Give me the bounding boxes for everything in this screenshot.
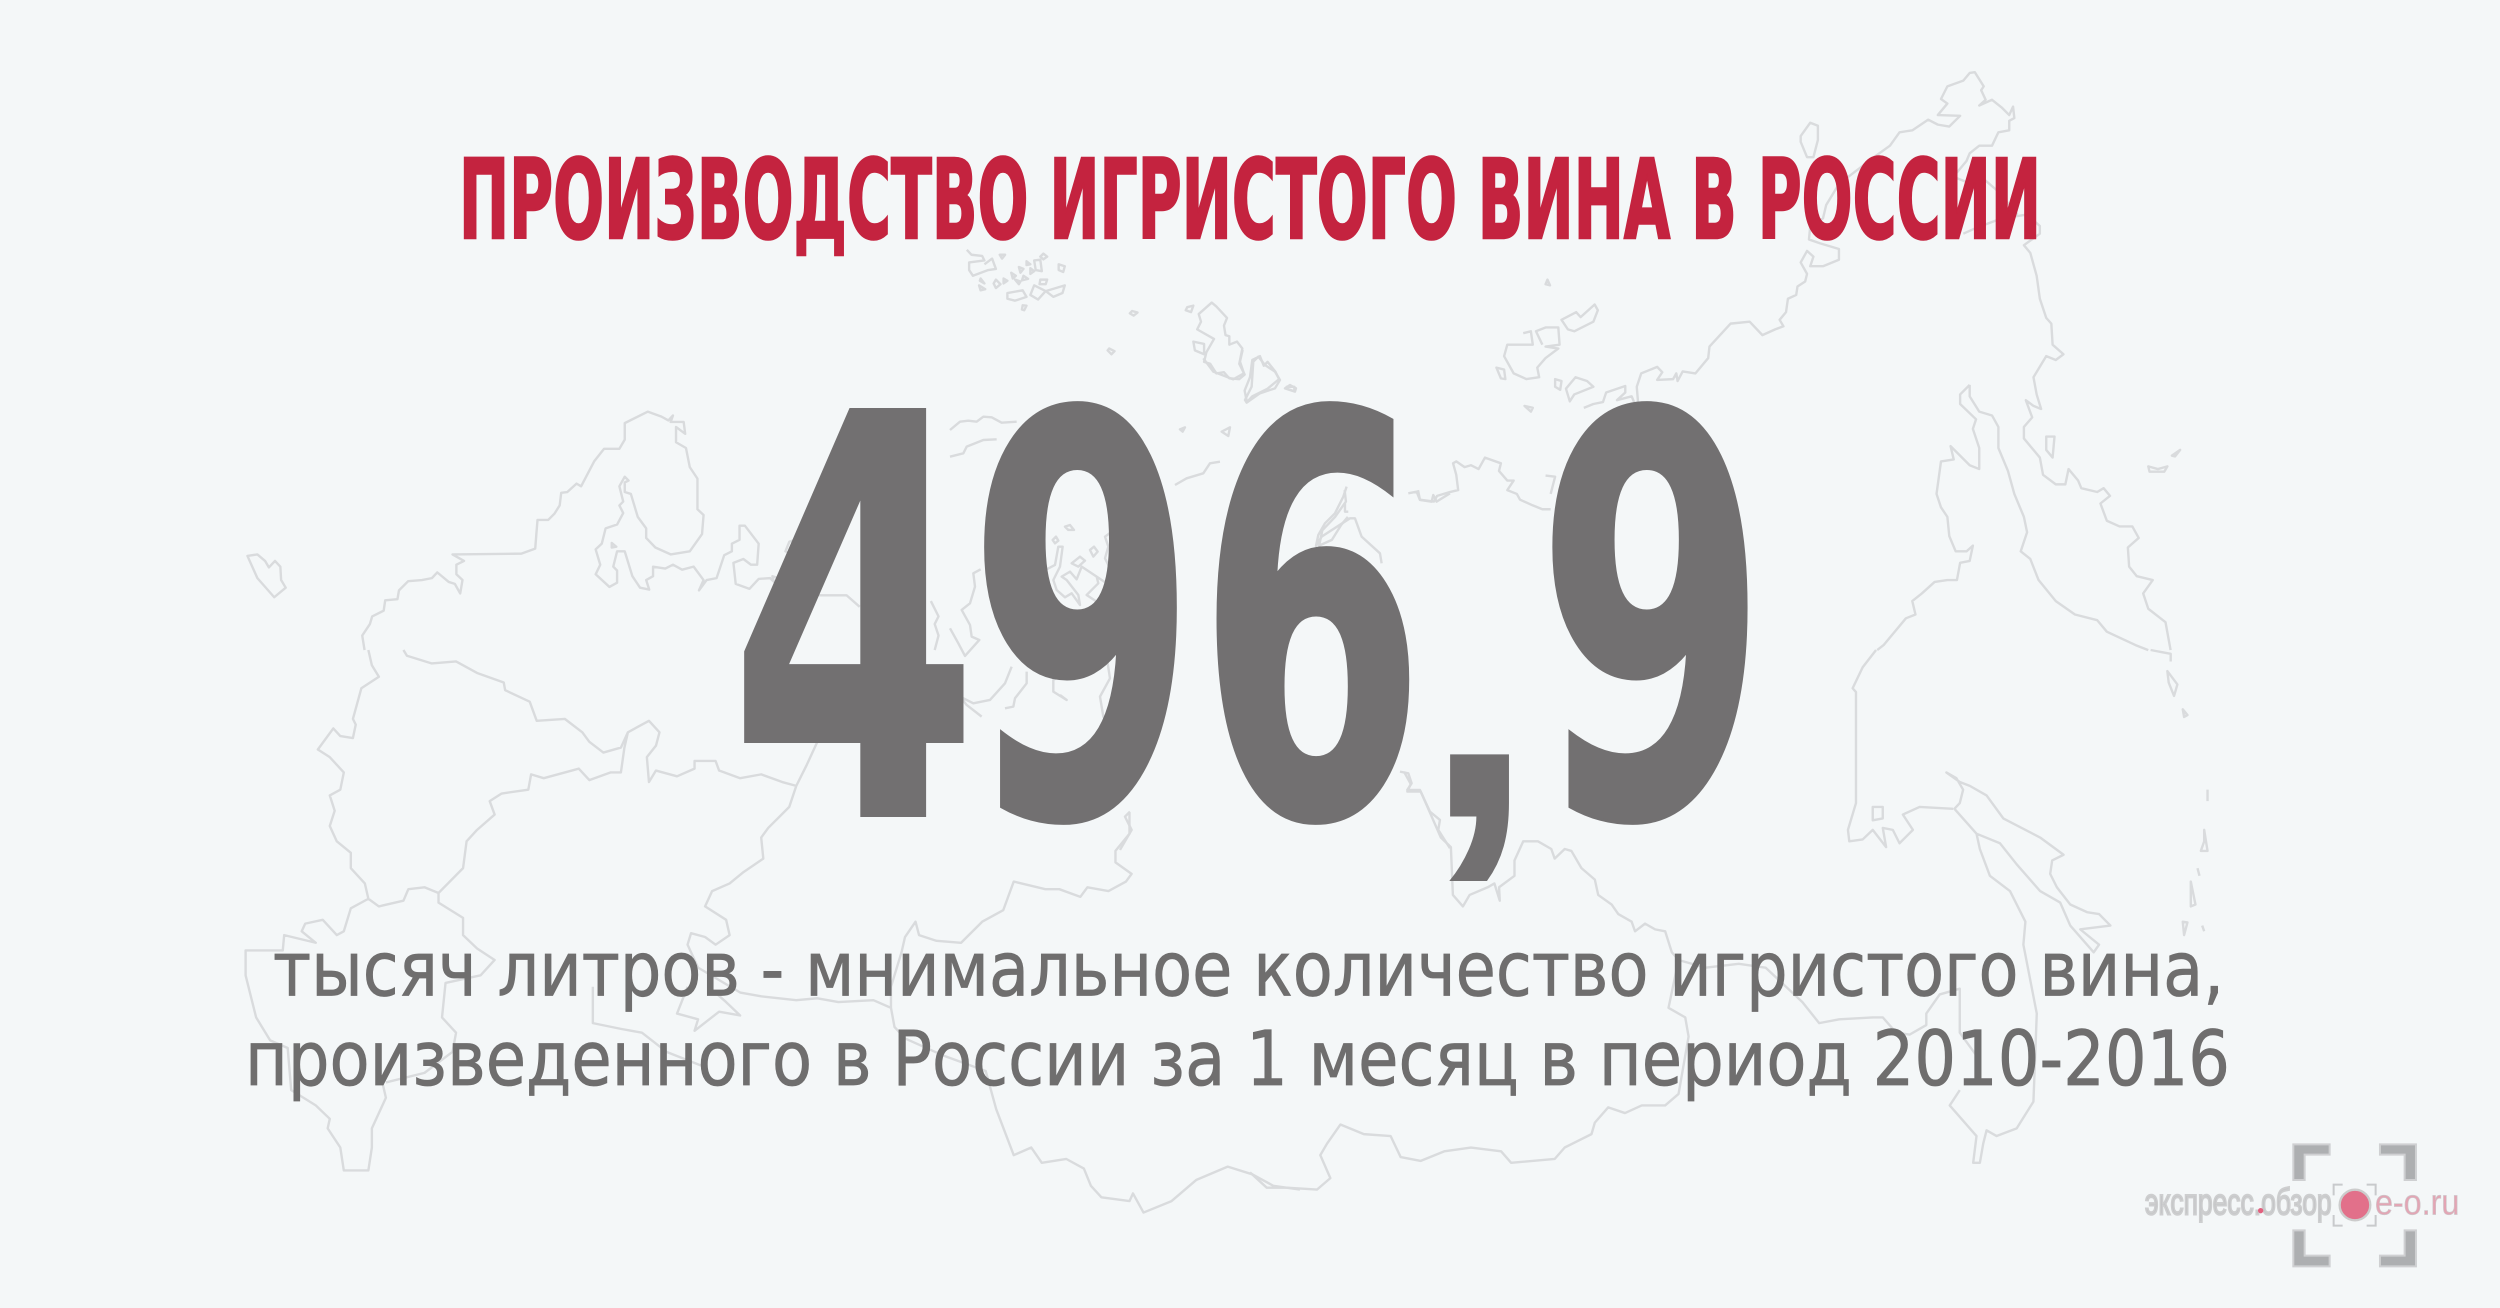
background map of Russia xyxy=(246,72,2208,1213)
big number 496,9: 9 xyxy=(1536,300,1768,948)
big number 496,9: 6 xyxy=(1197,300,1426,948)
big number 496,9: , xyxy=(1421,440,1537,906)
description text: произведенного в России за 1 месяц в период 2010-2016 xyxy=(245,1014,2230,1103)
big number 496,9: 9 xyxy=(968,300,1197,948)
icon: pink dot xyxy=(2258,1208,2263,1213)
big number 496,9: 4 xyxy=(729,300,979,948)
logo wordmark: экспресс.обзор xyxy=(2145,1180,2332,1222)
icon: pink circle xyxy=(2340,1190,2370,1220)
logo: экспресс-обзор e-o.ru xyxy=(2145,1144,2459,1266)
description text: тысяч литров - мнимальное количество игристого вина, xyxy=(273,924,2224,1014)
logo domain: e-o.ru xyxy=(2375,1181,2459,1222)
icon: viewfinder corners xyxy=(2293,1144,2416,1266)
icon: small brackets xyxy=(2334,1185,2376,1226)
description text xyxy=(245,924,2230,1103)
